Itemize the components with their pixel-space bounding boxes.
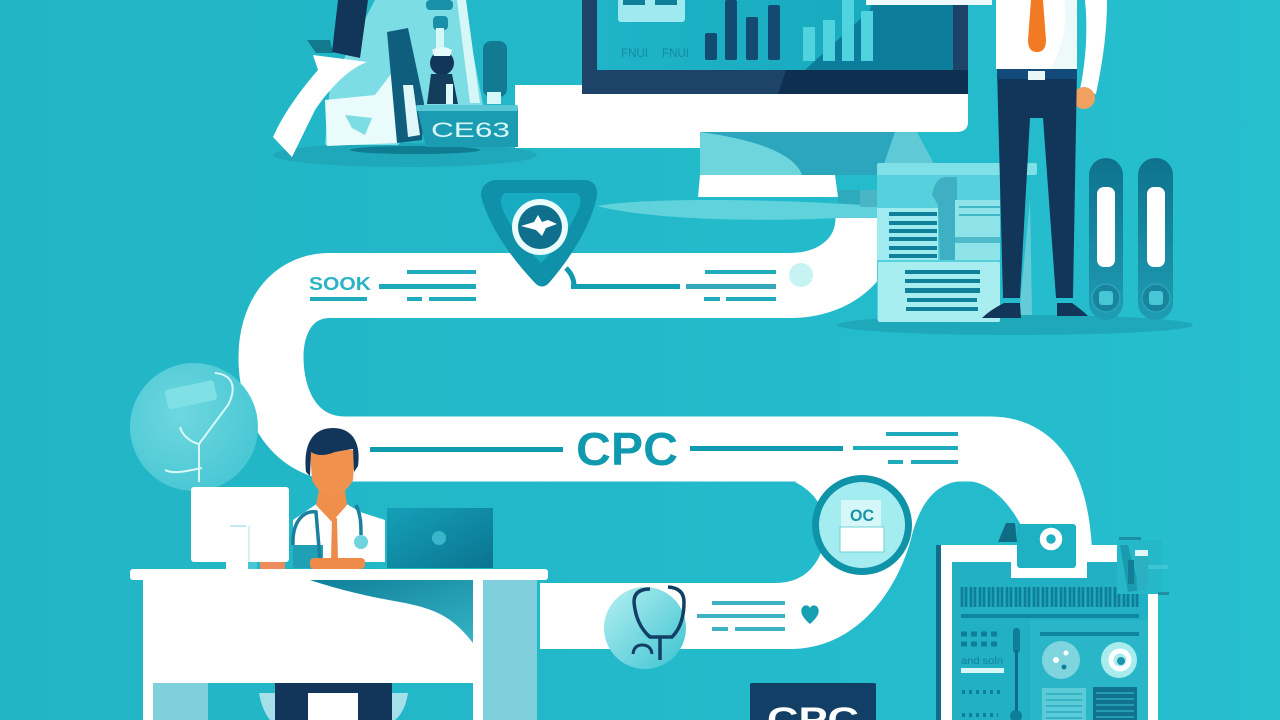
white banner	[866, 0, 992, 5]
doctor at desk	[259, 428, 408, 720]
CPC label box	[750, 683, 876, 720]
dark bar chart	[705, 0, 780, 60]
heading rule left	[370, 447, 563, 452]
tray label: CE63	[431, 119, 510, 142]
heart icon	[801, 605, 819, 624]
right pane rule	[1040, 632, 1139, 636]
stethoscope tube	[293, 505, 361, 560]
tie	[1028, 0, 1046, 52]
stethoscope circle	[604, 587, 686, 669]
upper road text right	[571, 270, 776, 301]
clipboard	[936, 523, 1169, 720]
badge text: OC	[850, 506, 874, 525]
desk dark corner	[310, 580, 473, 643]
hand	[1073, 87, 1095, 109]
binder one	[1089, 158, 1123, 320]
trousers	[997, 69, 1077, 298]
sheet with lines	[877, 208, 938, 260]
face	[310, 450, 355, 495]
dark column	[387, 28, 424, 143]
neck	[316, 490, 347, 522]
clip	[1017, 524, 1076, 568]
white strip	[961, 668, 1004, 673]
band behind swoosh	[838, 190, 878, 209]
clip ring	[1043, 531, 1059, 547]
light striped box	[1042, 688, 1086, 720]
screen label two: FNUI	[662, 46, 689, 60]
winding white road	[271, 85, 1060, 649]
heading rule right	[690, 446, 843, 451]
vertical tool	[1010, 628, 1022, 720]
tie	[331, 518, 338, 562]
small column base	[487, 92, 501, 104]
tray rim	[416, 105, 518, 111]
light dot	[789, 263, 813, 287]
ground shadow right	[837, 315, 1193, 335]
light bar chart	[803, 0, 873, 61]
hair	[305, 428, 359, 476]
small marks	[962, 692, 1002, 715]
clipboard edge	[936, 545, 941, 720]
screen icon	[618, 0, 685, 22]
column slot	[403, 85, 420, 137]
standing man	[982, 0, 1107, 318]
chair	[259, 693, 408, 720]
clipboard sheet	[952, 562, 1148, 720]
hands	[310, 558, 365, 569]
front sheet	[878, 262, 1000, 322]
clipboard board	[936, 545, 1158, 720]
dark teal block	[307, 40, 333, 53]
shield tail	[566, 268, 574, 286]
coat	[293, 503, 385, 562]
binder two	[1138, 158, 1173, 320]
CPC heading: CPC	[576, 423, 678, 475]
tray	[417, 108, 518, 147]
top left equipment group	[273, 0, 518, 157]
left shoe	[982, 303, 1021, 318]
white clip base	[1011, 545, 1087, 578]
lower road text	[697, 601, 785, 631]
doctor legs	[275, 683, 392, 720]
white strips	[457, 0, 480, 103]
hanging piece	[426, 0, 453, 10]
small column	[483, 41, 507, 97]
circle badge OC	[812, 475, 912, 575]
clip tab	[998, 523, 1017, 542]
desktop monitor back	[191, 487, 289, 571]
desk top	[130, 569, 548, 580]
left pane text: and soln	[961, 656, 1003, 667]
white patch	[325, 65, 398, 146]
dark screen panel	[805, 0, 953, 70]
shirt shade	[1050, 0, 1077, 69]
belt	[997, 69, 1077, 79]
navy trouser leg	[332, 0, 368, 58]
screen labels: FNUI	[621, 46, 648, 60]
divider rule	[961, 614, 1139, 618]
upper road text left	[309, 270, 476, 301]
dark base shadow	[350, 146, 480, 154]
right pane	[1030, 620, 1148, 720]
circle chart two	[1101, 642, 1137, 678]
ground shadow left	[273, 143, 537, 167]
laptop	[387, 508, 493, 568]
monitor	[515, 0, 992, 132]
left lower shirt	[293, 545, 323, 568]
dark striped box	[1093, 687, 1137, 720]
light swoosh	[597, 200, 878, 220]
binder column	[932, 177, 957, 260]
shirt	[996, 0, 1077, 69]
upper right sheet	[955, 200, 1000, 260]
white ribbon	[273, 55, 367, 157]
desk	[130, 569, 548, 720]
arm	[1080, 0, 1107, 94]
circle chart one	[1042, 641, 1080, 679]
middle road text right	[853, 432, 958, 464]
right clip device	[1117, 537, 1169, 595]
globe with stethoscope	[130, 363, 258, 491]
label SOOK: SOOK	[309, 274, 371, 294]
teal blotch	[345, 115, 372, 135]
light panel	[325, 0, 483, 145]
light streak between legs	[1019, 200, 1032, 315]
barcode	[962, 587, 1137, 607]
hanging link	[433, 16, 448, 30]
monitor stand	[698, 132, 940, 197]
belt buckle	[1028, 71, 1045, 80]
left grid marks	[961, 634, 997, 644]
right shoe	[1057, 303, 1088, 316]
document stack	[860, 163, 1037, 322]
small figure	[427, 28, 458, 104]
shield badge	[481, 180, 597, 286]
stethoscope head	[354, 535, 368, 549]
clock icon	[512, 199, 568, 255]
